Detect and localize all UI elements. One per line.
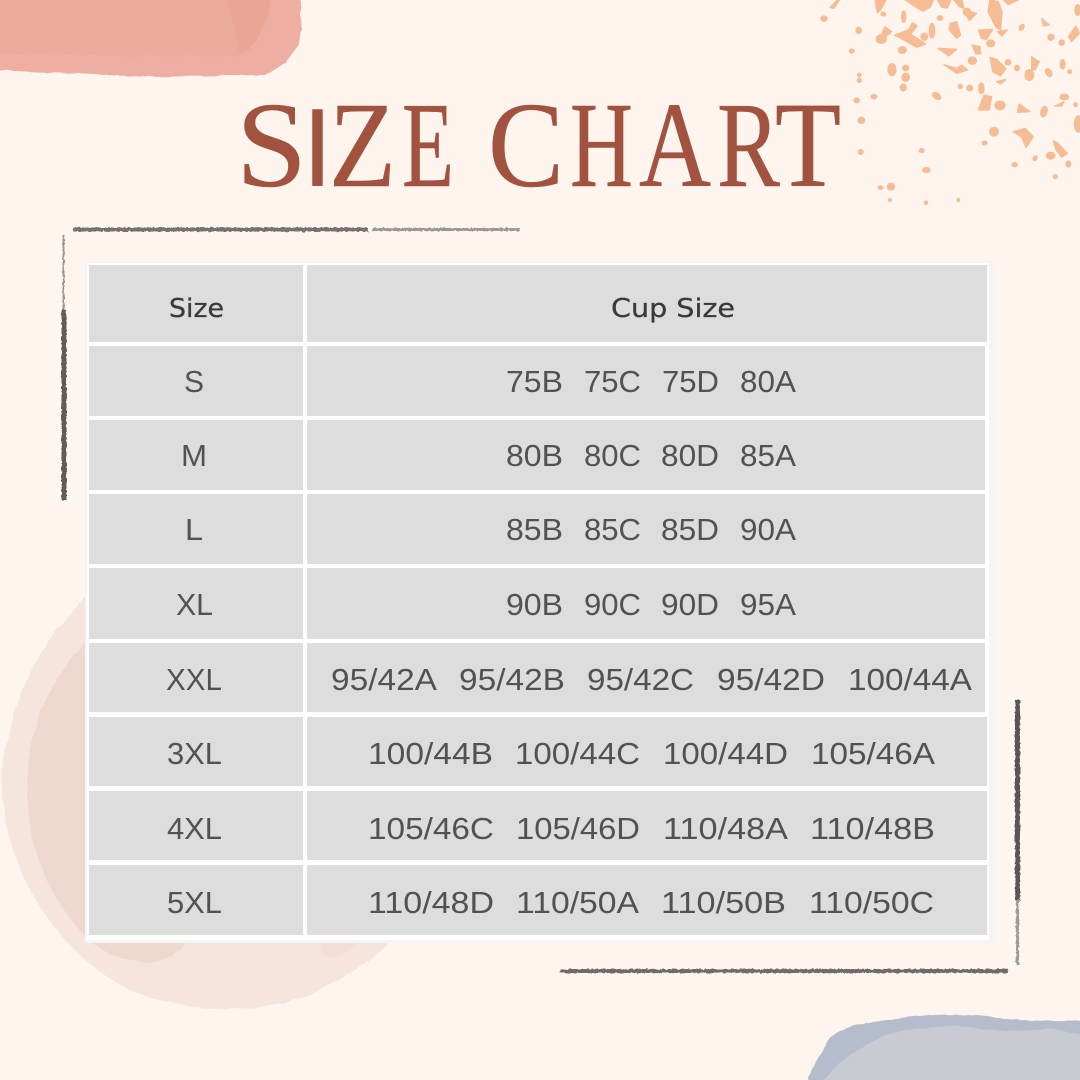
watercolor: pink top left xyxy=(0,0,303,77)
title: R xyxy=(717,78,780,213)
header row: Size xyxy=(169,294,224,324)
table cells xyxy=(89,265,987,935)
row XXL: 95/42A xyxy=(331,662,437,697)
title: T xyxy=(775,78,841,213)
row S: 80A xyxy=(740,364,796,399)
row 5XL: 110/50A xyxy=(516,885,639,920)
row M: 80B xyxy=(506,438,563,473)
row XL: 95A xyxy=(740,587,796,622)
row XXL xyxy=(166,662,972,697)
row M: 80D xyxy=(661,438,719,473)
row 4XL: 105/46D xyxy=(516,811,640,846)
row XXL: XXL xyxy=(166,662,222,697)
row XL: XL xyxy=(176,587,213,622)
row 4XL xyxy=(167,811,935,846)
frame line: top xyxy=(73,228,520,232)
row 4XL: 4XL xyxy=(167,811,222,846)
row XXL: 100/44A xyxy=(848,662,972,697)
row 5XL: 110/50B xyxy=(661,885,786,920)
row L: 85B xyxy=(506,512,563,547)
title: Z xyxy=(329,78,396,213)
row M: M xyxy=(181,438,207,473)
row 3XL: 100/44B xyxy=(368,736,493,771)
header row xyxy=(169,294,735,324)
table backing xyxy=(85,262,995,943)
title xyxy=(236,78,841,213)
frame line: bottom xyxy=(560,969,1008,973)
row 3XL: 100/44D xyxy=(663,736,788,771)
row XL: 90C xyxy=(584,587,641,622)
row 4XL: 105/46C xyxy=(368,811,494,846)
row L: 85D xyxy=(661,512,719,547)
title: C xyxy=(488,78,564,213)
header row: Cup Size xyxy=(611,294,735,324)
row S: 75D xyxy=(662,364,719,399)
title: I xyxy=(302,86,333,210)
title: A xyxy=(639,78,711,213)
watercolor: blue bottom right xyxy=(806,1015,1080,1080)
row XL: 90B xyxy=(506,587,563,622)
row L: 90A xyxy=(740,512,796,547)
watercolor: peach circle xyxy=(2,596,392,1009)
row 5XL: 5XL xyxy=(167,885,222,920)
row S: 75B xyxy=(506,364,563,399)
title: S xyxy=(236,78,307,213)
row M: 85A xyxy=(740,438,796,473)
row 3XL xyxy=(167,736,935,771)
row S: 75C xyxy=(584,364,641,399)
row 5XL: 110/50C xyxy=(809,885,934,920)
frame line: left xyxy=(62,235,66,500)
paint splatter top right xyxy=(821,0,1080,204)
size chart table xyxy=(85,262,995,943)
row 3XL: 3XL xyxy=(167,736,222,771)
row XL: 90D xyxy=(661,587,719,622)
row S: S xyxy=(184,364,204,399)
row 4XL: 110/48A xyxy=(663,811,788,846)
row L xyxy=(185,512,796,547)
title: E xyxy=(402,78,454,213)
row XXL: 95/42C xyxy=(587,662,694,697)
row M: 80C xyxy=(584,438,641,473)
row XXL: 95/42D xyxy=(717,662,825,697)
row S xyxy=(184,364,796,399)
row XXL: 95/42B xyxy=(459,662,565,697)
row 4XL: 110/48B xyxy=(810,811,935,846)
title: H xyxy=(570,78,633,213)
row 5XL: 110/48D xyxy=(368,885,494,920)
row 5XL xyxy=(167,885,934,920)
row L: L xyxy=(185,512,203,547)
row L: 85C xyxy=(584,512,641,547)
frame line: right xyxy=(1015,700,1020,965)
row 3XL: 105/46A xyxy=(811,736,935,771)
row M xyxy=(181,438,796,473)
row XL xyxy=(176,587,796,622)
row 3XL: 100/44C xyxy=(515,736,640,771)
